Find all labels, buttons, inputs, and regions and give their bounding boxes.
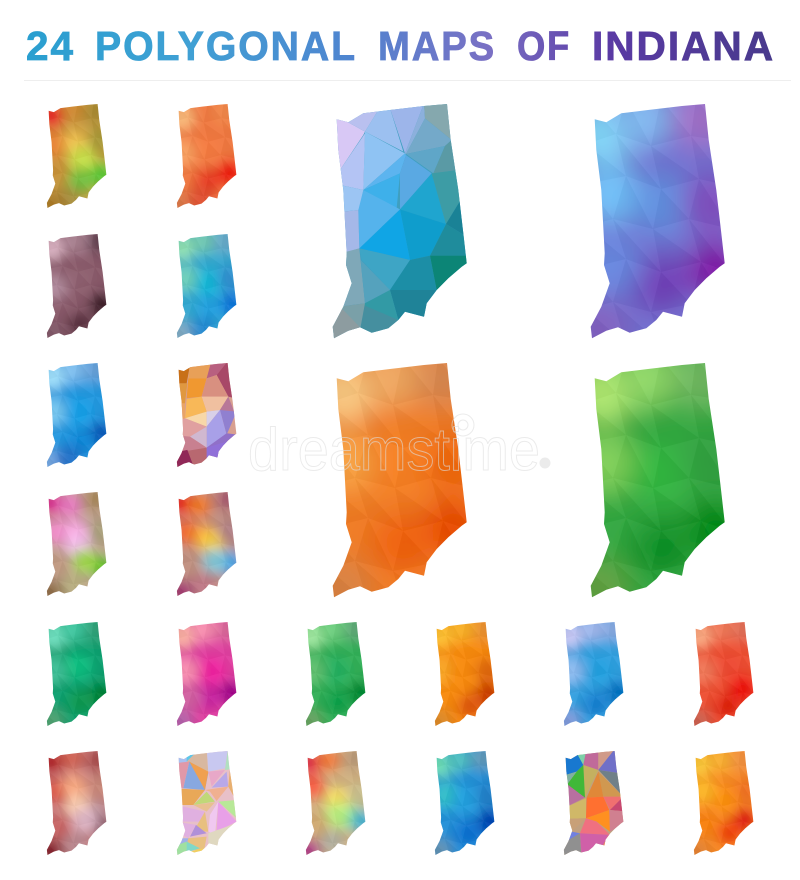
map: teal-cobalt, row 6 col 4 xyxy=(434,751,494,855)
title xyxy=(26,23,775,69)
map: large orange, row 3 col 3 xyxy=(332,363,467,598)
title: OF xyxy=(517,23,571,69)
title: MAPS xyxy=(378,23,496,69)
map: mint-blue, row 2 col 2 xyxy=(176,234,236,338)
title: INDIANA xyxy=(592,23,775,69)
map: large blue-teal, row 1 col 3 xyxy=(332,104,467,338)
map: large sky-blue to purple, row 1 col 4 xyxy=(590,104,725,338)
map: magenta-green, row 4 col 1 xyxy=(46,492,106,596)
map: green, row 5 col 3 xyxy=(306,622,366,726)
map: azure, row 3 col 1 xyxy=(46,363,106,467)
map: red-yellow-teal, row 6 col 3 xyxy=(306,751,366,855)
map: red-lime-green, row 1 col 1 xyxy=(46,104,106,208)
title: POLYGONAL xyxy=(95,23,357,69)
map: large green, row 3 col 4 xyxy=(590,363,725,598)
map: multicolour confetti, row 6 col 5 xyxy=(564,751,624,855)
map: emerald, row 5 col 1 xyxy=(46,622,106,726)
map: pink-magenta, row 5 col 2 xyxy=(176,622,236,726)
map: plum, row 2 col 1 xyxy=(46,234,106,338)
watermark: dreamstime xyxy=(248,416,540,483)
map: pastel confetti, row 6 col 2 xyxy=(176,751,236,855)
map: peach-red, row 1 col 2 xyxy=(176,104,236,208)
map: coral-red, row 5 col 6 xyxy=(694,622,754,726)
map: crimson-cream, row 6 col 1 xyxy=(46,751,106,855)
map: amber, row 5 col 4 xyxy=(434,622,494,726)
title: 24 xyxy=(26,23,75,69)
map: periwinkle-blue, row 5 col 5 xyxy=(564,622,624,726)
map: red-yellow-blue, row 4 col 2 xyxy=(176,492,236,596)
map: yellow-orange-red, row 6 col 6 xyxy=(694,751,754,855)
map: orange-lilac facets, row 3 col 2 xyxy=(176,363,236,467)
